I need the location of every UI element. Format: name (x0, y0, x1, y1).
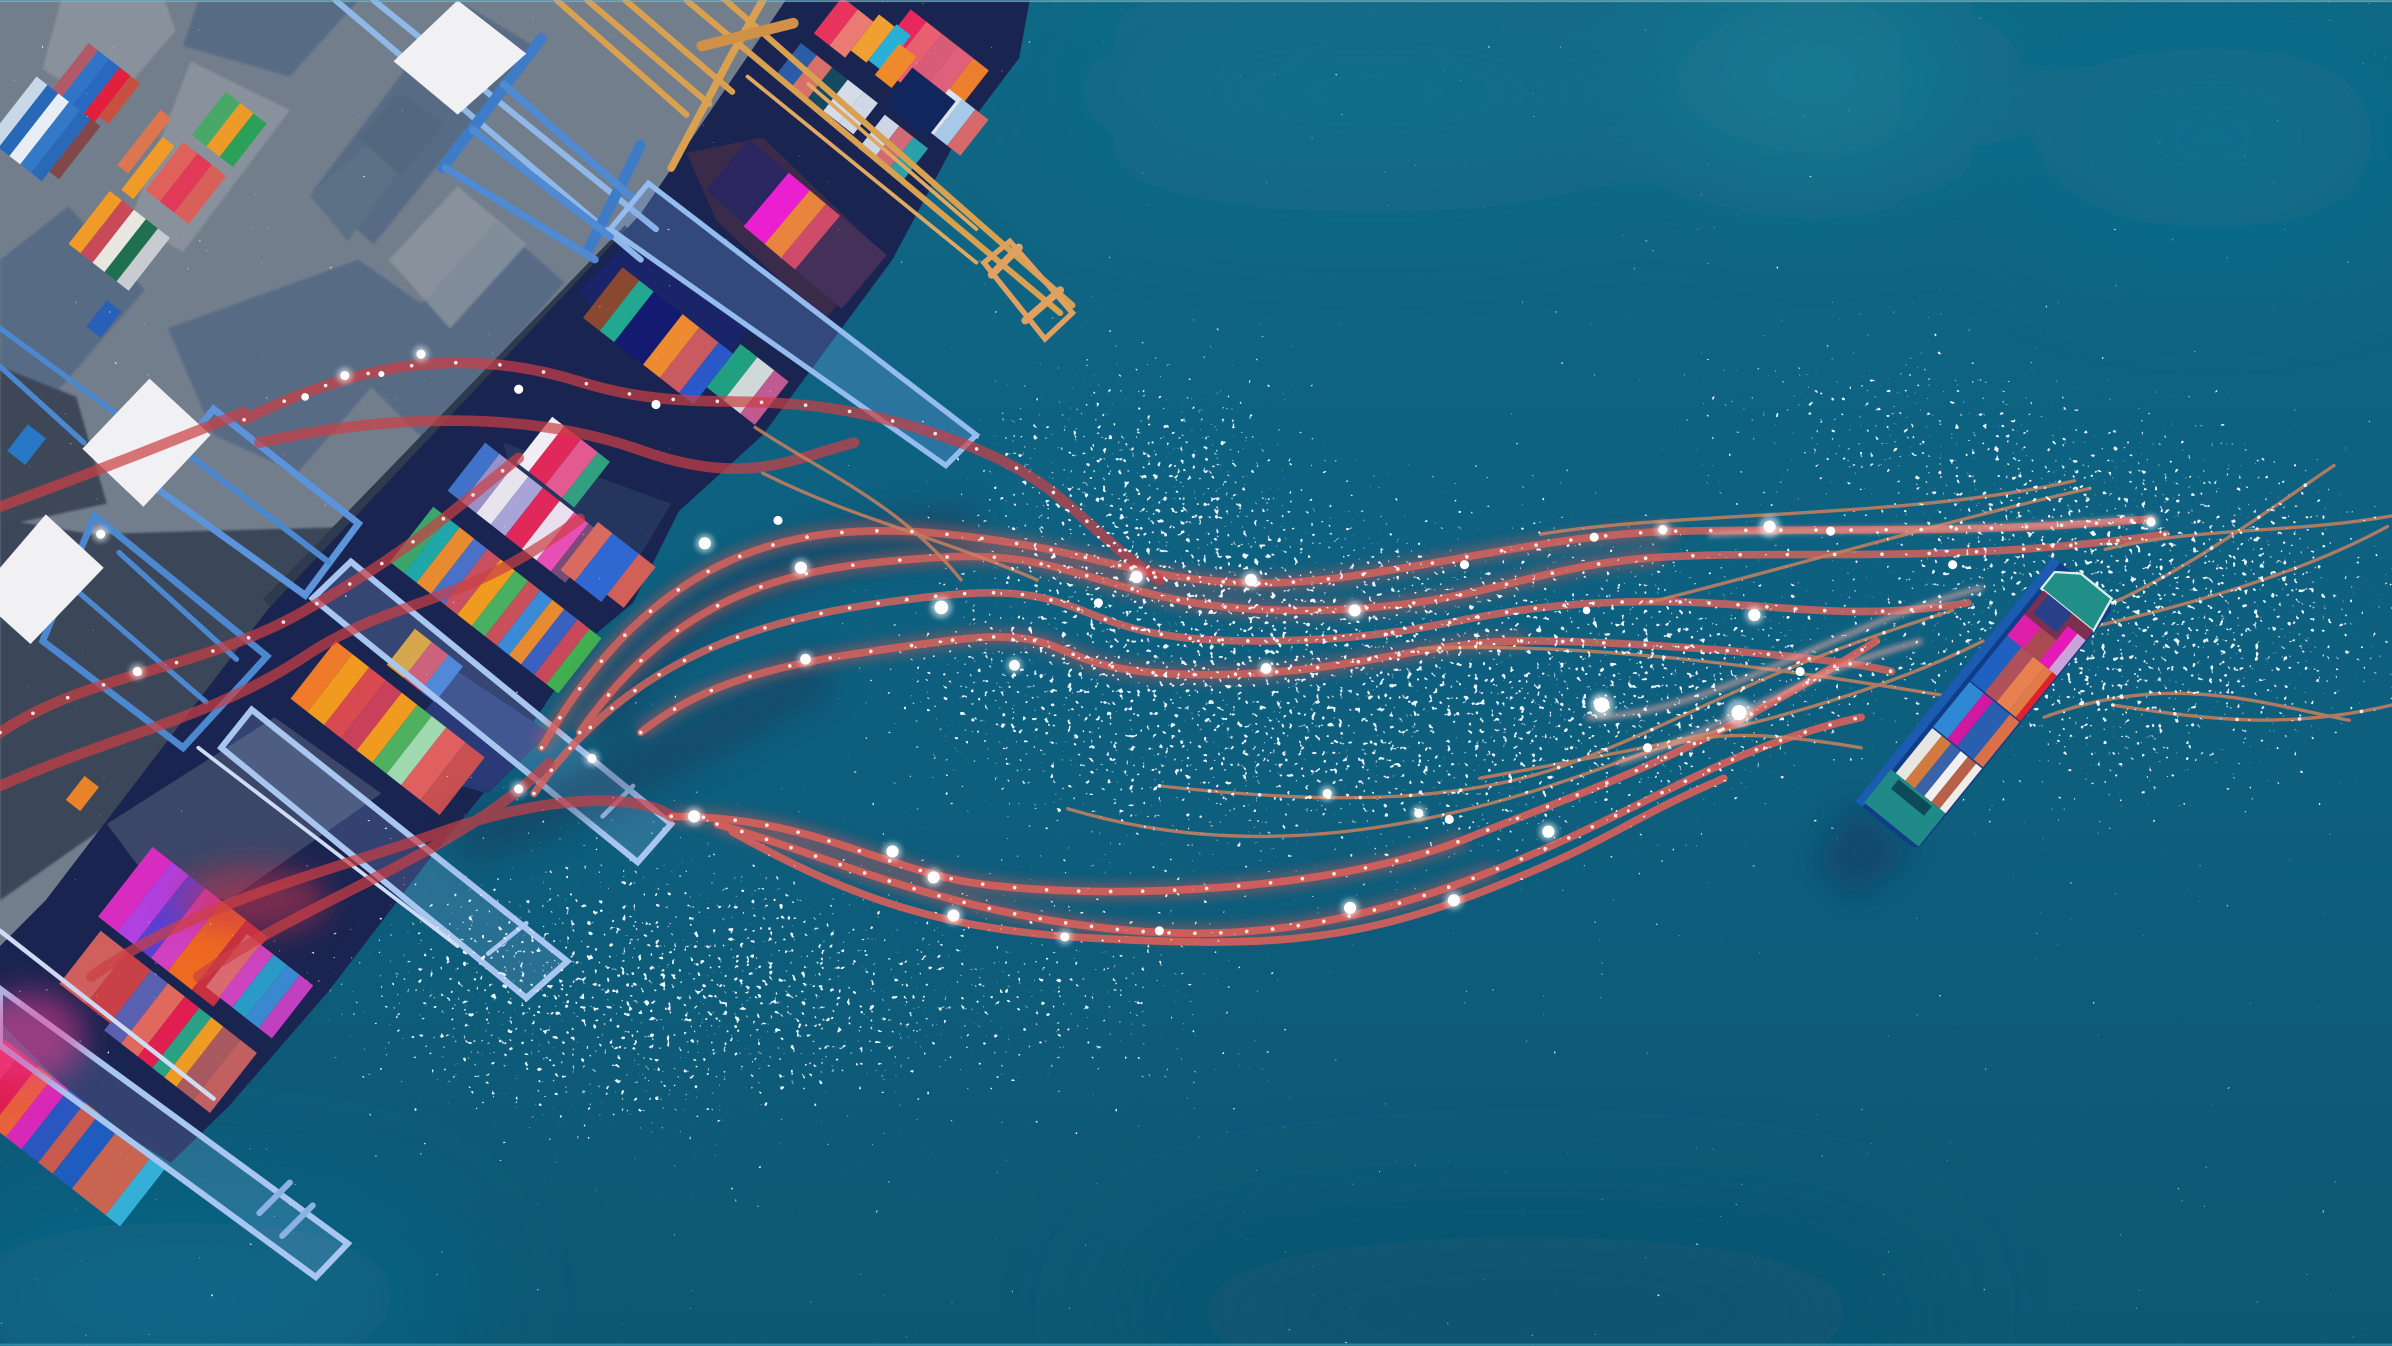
data ribbons: port arcs (0, 363, 1159, 977)
crane machinery houses (0, 0, 526, 644)
containers: magenta stern rows (54, 847, 313, 1113)
container ship at berth: hull (0, 0, 1030, 1163)
containers: upper ship bay (871, 9, 989, 121)
quay apron (0, 0, 786, 946)
wake shadow beneath data ribbons (458, 534, 976, 839)
data ribbons: upper stream (534, 519, 2166, 794)
orange crane (557, 0, 1072, 339)
glowing nodes (96, 350, 2156, 941)
containers: aft block (0, 1039, 167, 1226)
pink light bloom over stern cranes (0, 867, 328, 1083)
containers: lower bow bay (291, 641, 485, 815)
containers: upper ship forward bays (776, 0, 989, 182)
containers: forward deck rows (390, 417, 656, 694)
scattered sea sparkle particles (320, 351, 2392, 1122)
containers: mid ship dark bay (583, 258, 789, 442)
blue gantry cranes middle and lower (0, 328, 671, 1277)
blue gantry crane top (336, 0, 976, 466)
containers: small orange box on apron (66, 776, 99, 811)
containers: quay stacks (0, 43, 267, 465)
data ribbons: lower stream (671, 641, 1876, 942)
beads of light along ribbons (0, 363, 2392, 933)
data ribbons glow (542, 531, 1678, 933)
containers: magenta bay (704, 139, 887, 309)
containers: small orange block (387, 629, 463, 702)
glowing filament core near ship (1587, 519, 2136, 763)
glowing nodes with halos (93, 347, 2159, 945)
container ship at sea: shadow (1815, 801, 1915, 900)
container ship at sea (1855, 553, 2118, 851)
thin orange filaments (755, 427, 2392, 836)
